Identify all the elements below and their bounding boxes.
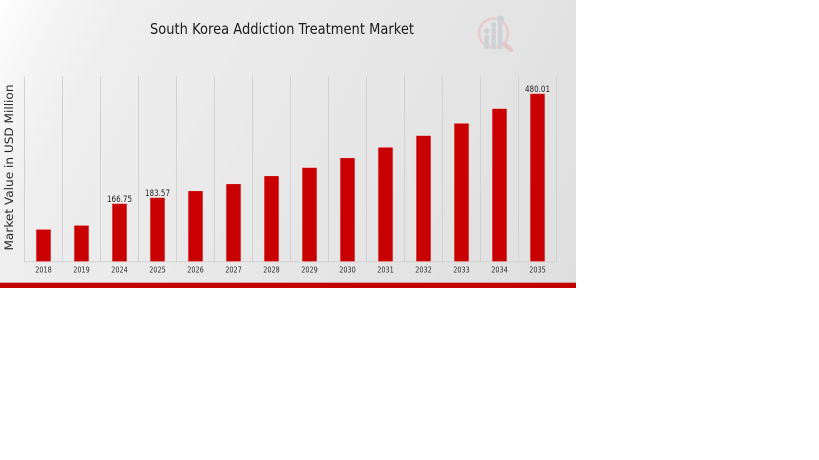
panel: chart background	[0, 0, 576, 283]
x axis year labels: 2028	[263, 264, 280, 274]
value labels: 480.01	[525, 85, 550, 95]
value labels	[107, 85, 550, 205]
bar: 2030	[340, 158, 355, 262]
bar: 2019	[74, 225, 89, 262]
icon: magnifier logo watermark	[479, 15, 511, 50]
bar: 2028	[264, 176, 279, 262]
x axis year labels: 2025	[149, 264, 166, 274]
value labels: 183.57	[145, 189, 170, 199]
x axis year labels: 2031	[377, 264, 394, 274]
bar chart: yearly market value	[36, 94, 545, 262]
x axis year labels: 2029	[301, 264, 318, 274]
bar: 2025	[150, 198, 165, 262]
x axis year labels: 2024	[111, 264, 128, 274]
x axis year labels: 2019	[73, 264, 90, 274]
x axis year labels: 2018	[35, 264, 52, 274]
bar: 2032	[416, 136, 431, 262]
x axis year labels: 2034	[491, 264, 508, 274]
x axis year labels: 2027	[225, 264, 242, 274]
x axis year labels: 2030	[339, 264, 356, 274]
bar: 2034	[492, 108, 507, 262]
title: South Korea Addiction Treatment Market	[150, 20, 414, 38]
x axis year labels: 2035	[529, 264, 546, 274]
footer band	[0, 283, 576, 288]
x axis year labels: 2033	[453, 264, 470, 274]
bar: 2026	[188, 191, 203, 262]
bar: 2033	[454, 123, 469, 262]
bar: 2027	[226, 184, 241, 262]
bar: 2035	[530, 94, 545, 262]
value labels: 166.75	[107, 195, 132, 205]
x axis year labels	[35, 264, 546, 274]
bar: 2031	[378, 147, 393, 262]
x axis year labels: 2026	[187, 264, 204, 274]
x axis year labels: 2032	[415, 264, 432, 274]
y axis label: Market Value in USD Million	[2, 84, 16, 250]
bar: 2024	[112, 204, 127, 262]
bar: 2018	[36, 229, 51, 262]
bar: 2029	[302, 168, 317, 262]
